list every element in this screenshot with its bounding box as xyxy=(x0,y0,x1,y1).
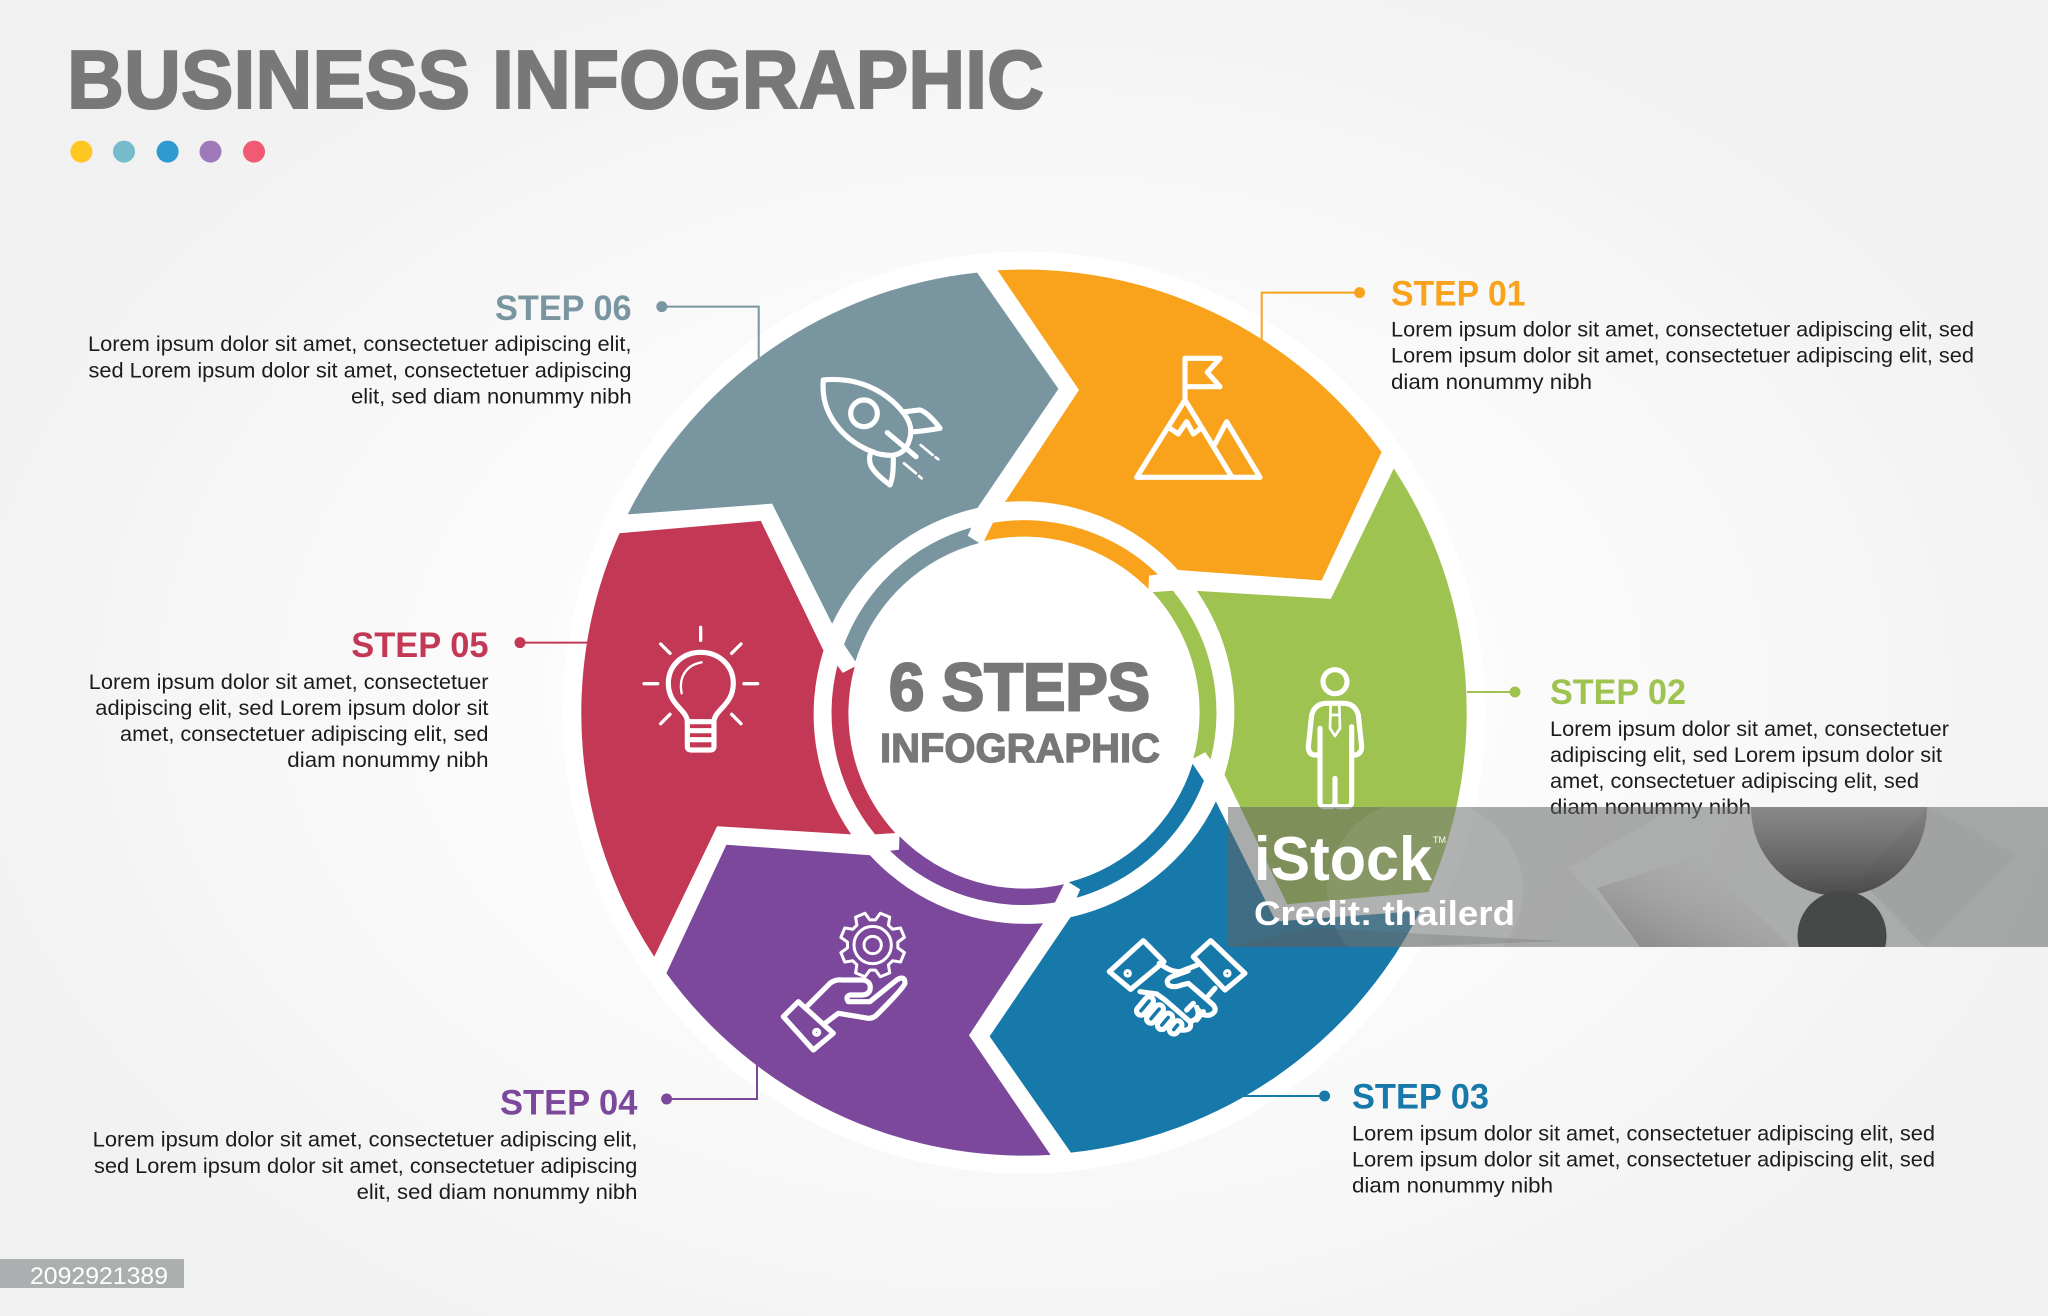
segment: step 04 xyxy=(666,845,1050,1156)
icon: businessman xyxy=(1308,670,1362,807)
callout: step 02: diam nonummy nibh xyxy=(1550,796,1751,819)
callout: step 06: STEP 06 xyxy=(495,289,632,328)
centre label: INFOGRAPHIC xyxy=(880,725,1160,771)
centre label xyxy=(880,650,1160,771)
segment: step 05 xyxy=(462,469,923,957)
callout: step 04: STEP 04 xyxy=(500,1084,638,1122)
callout: step 03: Lorem ipsum dolor sit amet, consectetuer adipiscing elit, sed xyxy=(1352,1122,1935,1146)
centre label: 6 STEPS xyxy=(889,650,1150,725)
icon: light bulb xyxy=(644,627,758,750)
callout: step 02: amet, consectetuer adipiscing elit, sed xyxy=(1550,770,1919,793)
callout: step 04: sed Lorem ipsum dolor sit amet, consectetuer adipiscing xyxy=(94,1155,637,1178)
inner ring arcs xyxy=(790,500,1258,925)
segment: step 06 xyxy=(627,181,1088,669)
callout: step 06: elit, sed diam nonummy nibh xyxy=(351,385,632,408)
callout: step 05: adipiscing elit, sed Lorem ipsum dolor sit xyxy=(95,697,489,720)
callout: step 03 xyxy=(1240,1078,1935,1198)
callout: step 02: STEP 02 xyxy=(1550,673,1686,712)
callout: step 05: diam nonummy nibh xyxy=(287,749,488,772)
callout: step 02: adipiscing elit, sed Lorem ipsum dolor sit xyxy=(1550,744,1942,767)
callout: step 05: amet, consectetuer adipiscing elit, sed xyxy=(120,723,488,746)
watermark band xyxy=(1228,807,2048,947)
callout: step 02 xyxy=(1467,673,1949,819)
callout: step 03: Lorem ipsum dolor sit amet, consectetuer adipiscing elit, sed xyxy=(1352,1148,1935,1172)
callout: step 02: Lorem ipsum dolor sit amet, consectetuer xyxy=(1550,718,1949,741)
callout: step 03: STEP 03 xyxy=(1352,1078,1489,1116)
title: BUSINESS INFOGRAPHIC xyxy=(67,33,1044,126)
callout: step 05 xyxy=(89,626,588,772)
callout: step 06: sed Lorem ipsum dolor sit amet, consectetuer adipiscing xyxy=(88,359,632,382)
callout: step 04: elit, sed diam nonummy nibh xyxy=(357,1181,637,1204)
segment: step 01 xyxy=(998,270,1382,580)
watermark band: iStock xyxy=(1254,825,1432,894)
image id badge: 2092921389 xyxy=(30,1263,168,1290)
callout: step 06 xyxy=(88,289,759,408)
white wheel backing xyxy=(563,252,1485,1174)
colour dots xyxy=(70,141,265,163)
callout: step 04: Lorem ipsum dolor sit amet, consectetuer adipiscing elit, xyxy=(93,1129,637,1152)
icon: mountain flag xyxy=(1137,358,1260,477)
callout: step 01: Lorem ipsum dolor sit amet, consectetuer adipiscing elit, sed xyxy=(1391,345,1974,368)
callout: step 06: Lorem ipsum dolor sit amet, consectetuer adipiscing elit, xyxy=(88,333,632,356)
callout: step 01: Lorem ipsum dolor sit amet, consectetuer adipiscing elit, sed xyxy=(1391,319,1974,342)
callout: step 03: diam nonummy nibh xyxy=(1352,1174,1553,1198)
callout: step 04 xyxy=(93,1062,757,1204)
icon: handshake xyxy=(1109,941,1245,1036)
callout: step 01: STEP 01 xyxy=(1391,274,1526,314)
watermark band: TM xyxy=(1433,835,1446,845)
icon: rocket xyxy=(823,379,940,485)
segment: step 02 xyxy=(1125,468,1586,956)
callout: step 01: diam nonummy nibh xyxy=(1391,371,1592,394)
wheel segments xyxy=(462,181,1586,1244)
callout: step 05: Lorem ipsum dolor sit amet, consectetuer xyxy=(89,671,489,694)
icon: hand with gear xyxy=(783,913,905,1050)
callout: step 01 xyxy=(1262,274,1974,394)
callout: step 05: STEP 05 xyxy=(351,626,488,665)
watermark band: Credit: thailerd xyxy=(1254,895,1515,933)
image id badge xyxy=(0,1259,184,1290)
segment: step 03 xyxy=(960,756,1421,1244)
